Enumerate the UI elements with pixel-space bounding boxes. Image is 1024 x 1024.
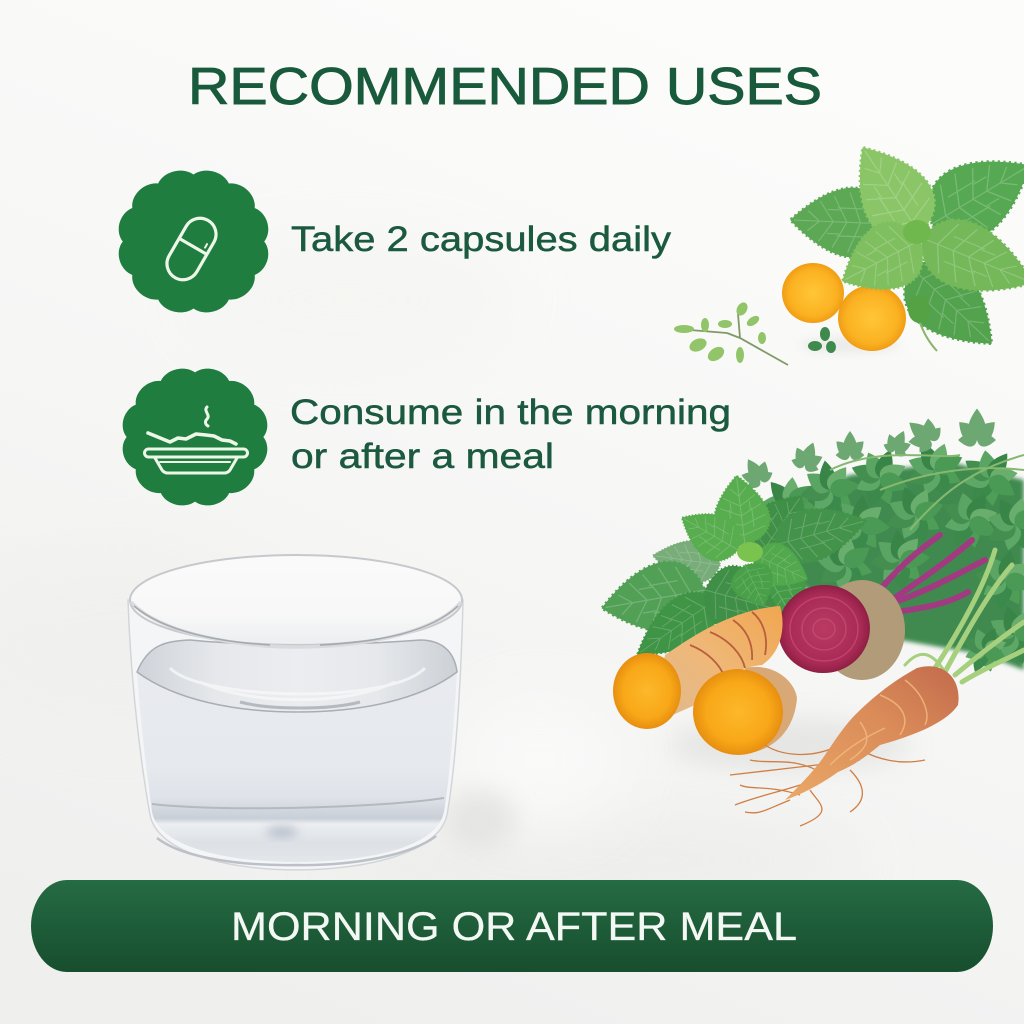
ginseng carrot <box>730 666 959 826</box>
beet <box>771 578 905 680</box>
water volume <box>137 672 457 862</box>
icon: plate with steaming food <box>144 407 248 473</box>
illustration: mint and turmeric top right <box>674 128 1024 369</box>
turmeric slices <box>782 263 906 351</box>
text: consume in the morning or after a meal: Consume in the morning <box>290 393 731 432</box>
bottom banner <box>31 880 993 972</box>
glass body <box>128 600 463 870</box>
herb mass <box>732 407 1024 681</box>
water surface <box>137 640 457 712</box>
title: RECOMMENDED USES <box>188 58 822 116</box>
small sprig <box>674 300 788 365</box>
water ripples <box>170 668 425 700</box>
icon: meal badge <box>123 369 267 505</box>
small bud leaf <box>908 295 937 351</box>
illustration: glass of water <box>128 555 516 870</box>
root vegetable greens <box>905 550 1024 682</box>
turmeric root <box>613 606 797 755</box>
glass shadow <box>444 790 516 850</box>
glass base lines <box>152 798 444 865</box>
banner text: MORNING OR AFTER MEAL <box>231 905 797 949</box>
small leaf cluster <box>808 327 836 353</box>
surface shadow <box>670 719 910 771</box>
icon: capsule badge <box>119 171 268 312</box>
glass rim <box>130 555 462 645</box>
text: consume in the morning or after a meal <box>290 393 731 476</box>
text: consume in the morning or after a meal: or after a meal <box>291 437 554 476</box>
illustration: herbs and root vegetables <box>596 407 1024 826</box>
large mint leaves <box>596 472 874 674</box>
icon: capsule <box>161 212 222 286</box>
text: take 2 capsules daily: Take 2 capsules daily <box>291 220 672 259</box>
mint leaves <box>789 128 1024 369</box>
beet stalks <box>880 535 985 612</box>
